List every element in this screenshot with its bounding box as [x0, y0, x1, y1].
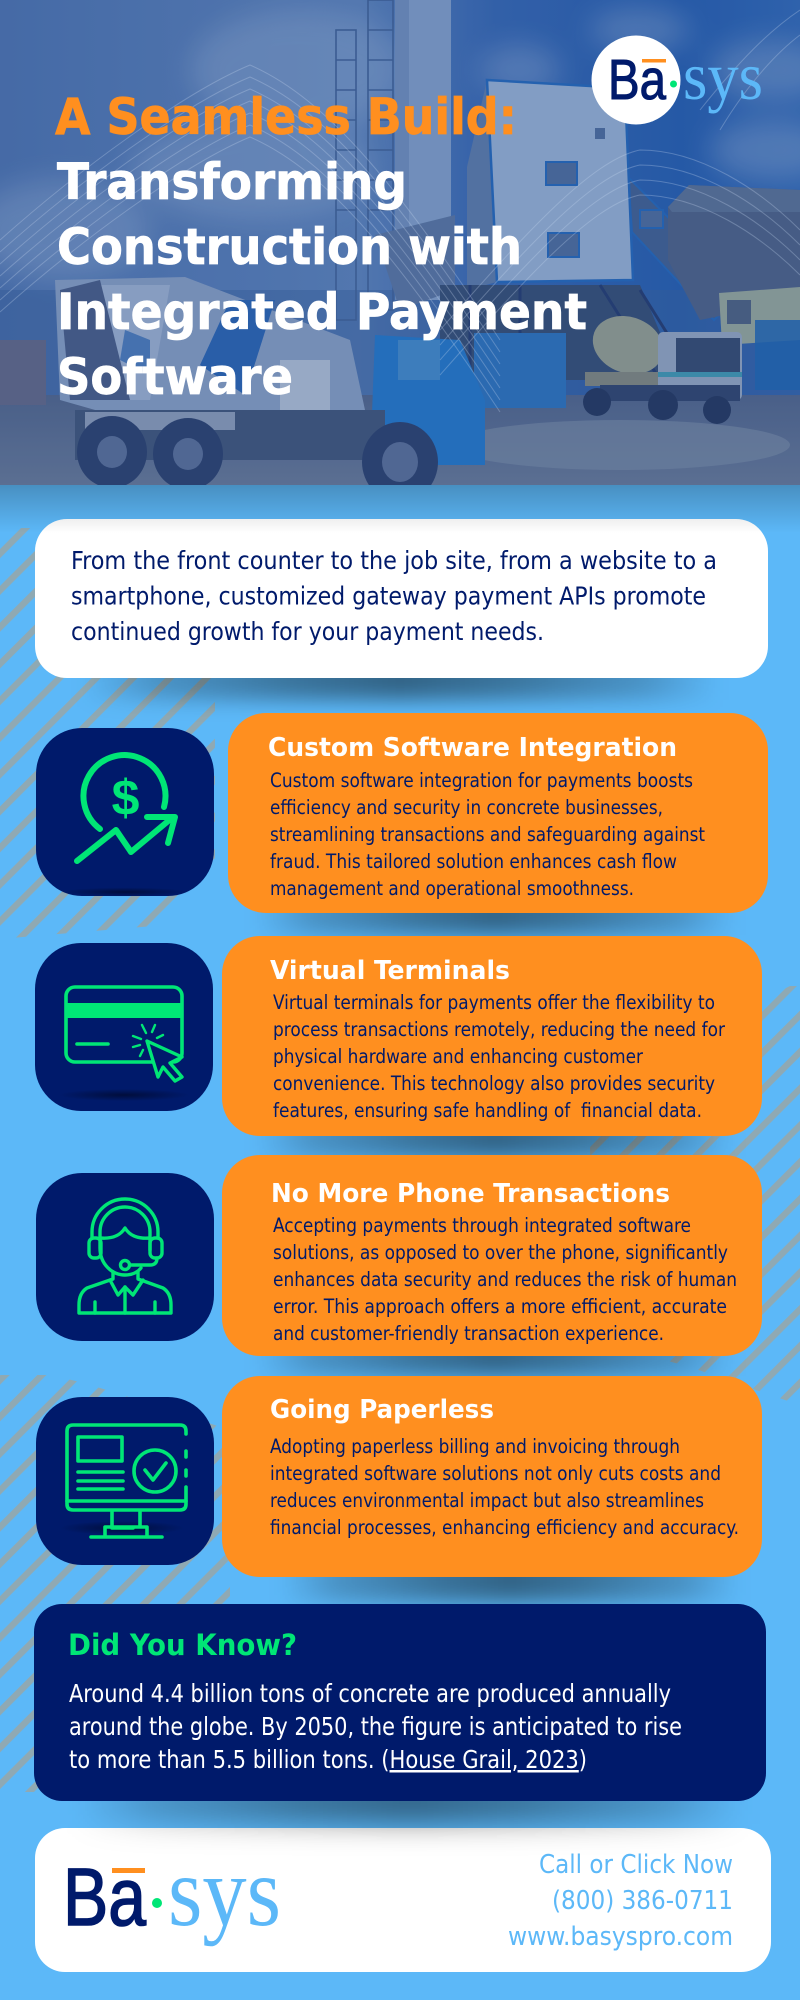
hero title: Software	[57, 348, 293, 406]
footer logo: sys	[168, 1836, 281, 1947]
footer card	[35, 1828, 771, 1972]
right truck	[592, 316, 658, 372]
hero title: Integrated Payment	[57, 283, 587, 341]
heading: Did You Know?	[68, 1628, 297, 1662]
icon tile: dollar growth: $	[112, 770, 140, 826]
body text	[69, 1679, 682, 1774]
hero title: Construction with	[57, 218, 522, 276]
heading: Custom Software Integration	[268, 733, 677, 763]
cabin	[719, 287, 800, 345]
right building	[668, 185, 800, 320]
body text: Accepting payments through integrated software	[273, 1214, 691, 1237]
hero bottom shadow	[0, 485, 800, 533]
heading: Virtual Terminals	[270, 956, 510, 986]
footer logo	[63, 1836, 281, 1947]
intro card: smartphone, customized gateway payment APIs promote	[71, 582, 706, 610]
body text: solutions, as opposed to over the phone, significantly	[273, 1241, 728, 1264]
card 1 shadow	[255, 895, 735, 935]
body text	[273, 1214, 737, 1345]
heading: Going Paperless	[270, 1395, 494, 1425]
body text: around the globe. By 2050, the figure is anticipated to rise	[69, 1712, 682, 1741]
left truck chassis	[75, 410, 385, 460]
body text: Virtual terminals for payments offer the flexibility to	[273, 991, 715, 1014]
panel: custom software integration	[228, 713, 768, 913]
intro card: continued growth for your payment needs.	[71, 617, 544, 646]
small hopper	[375, 215, 455, 310]
panel: did you know	[34, 1604, 766, 1801]
card 4 shadow	[280, 1558, 740, 1602]
body text: and customer-friendly transaction experience.	[273, 1322, 664, 1345]
decorative stripes: lower left	[0, 1375, 230, 1792]
batching plant	[467, 80, 497, 290]
panel: going paperless	[222, 1376, 762, 1577]
hero title: Transforming	[57, 153, 407, 211]
footer logo: Ba	[63, 1852, 146, 1943]
left truck cab	[370, 335, 485, 465]
decorative stripes: upper left	[0, 528, 215, 938]
conveyor	[630, 180, 718, 321]
body text: fraud. This tailored solution enhances cash flow	[270, 850, 677, 873]
panel: virtual terminals	[222, 936, 762, 1136]
contact details: (800) 386-0711	[552, 1886, 733, 1916]
body text	[270, 1435, 739, 1539]
body text: convenience. This technology also provides security	[273, 1072, 715, 1095]
heading: No More Phone Transactions	[271, 1179, 670, 1209]
body text	[270, 769, 705, 900]
body text: features, ensuring safe handling of financial data.	[273, 1099, 702, 1122]
hero photo: construction site	[0, 0, 800, 502]
body text: reduces environmental impact but also streamlines	[270, 1489, 704, 1512]
intro card: From the front counter to the job site, from a website to a	[71, 546, 717, 575]
silo	[409, 0, 451, 300]
low building	[0, 340, 46, 405]
contact details: www.basyspro.com	[508, 1922, 733, 1952]
card 2 shadow	[255, 1118, 735, 1158]
body text: Custom software integration for payments boosts	[270, 769, 693, 792]
left truck mixer	[55, 277, 365, 410]
header logo: sys	[683, 38, 763, 114]
body text: management and operational smoothness.	[270, 877, 634, 900]
intro card shadow	[80, 658, 720, 700]
body text: efficiency and security in concrete businesses,	[270, 796, 663, 819]
plant understructure	[440, 285, 680, 380]
contour lines overlay	[0, 10, 800, 412]
body text: physical hardware and enhancing customer	[273, 1045, 644, 1068]
header logo	[592, 36, 763, 124]
body text: Adopting paperless billing and invoicing through	[270, 1435, 680, 1458]
intro card	[35, 519, 768, 678]
body text: Around 4.4 billion tons of concrete are produced annually	[69, 1679, 671, 1708]
icon tile: support agent	[36, 1173, 214, 1341]
body text: streamlining transactions and safeguarding against	[270, 823, 705, 846]
body text: process transactions remotely, reducing the need for	[273, 1018, 726, 1041]
ladder towers	[336, 0, 393, 320]
body text	[273, 991, 726, 1122]
wheels	[77, 416, 438, 485]
body text: error. This approach offers a more efficient, accurate	[273, 1295, 727, 1318]
decorative stripes: right	[590, 986, 800, 1405]
body text: to more than 5.5 billion tons. (House Grail, 2023)	[69, 1745, 587, 1774]
body text: financial processes, enhancing efficiency and accuracy.	[270, 1516, 739, 1539]
icon tile: monitor check	[36, 1397, 214, 1565]
card 3 shadow	[255, 1338, 735, 1376]
icon tile: dollar growth	[36, 728, 214, 896]
header logo: Ba	[608, 48, 666, 112]
hero title	[55, 88, 587, 406]
panel: no more phone transactions	[222, 1155, 762, 1356]
contact details	[508, 1850, 733, 1952]
container	[474, 333, 566, 408]
hero title: A Seamless Build:	[55, 88, 517, 146]
did you know shadow	[75, 1778, 745, 1824]
icon tile: credit card click	[35, 943, 213, 1111]
body text: integrated software solutions not only cuts costs and	[270, 1462, 721, 1485]
ground	[0, 395, 800, 485]
body text: enhances data security and reduces the risk of human	[273, 1268, 737, 1291]
contact details: Call or Click Now	[539, 1850, 733, 1880]
